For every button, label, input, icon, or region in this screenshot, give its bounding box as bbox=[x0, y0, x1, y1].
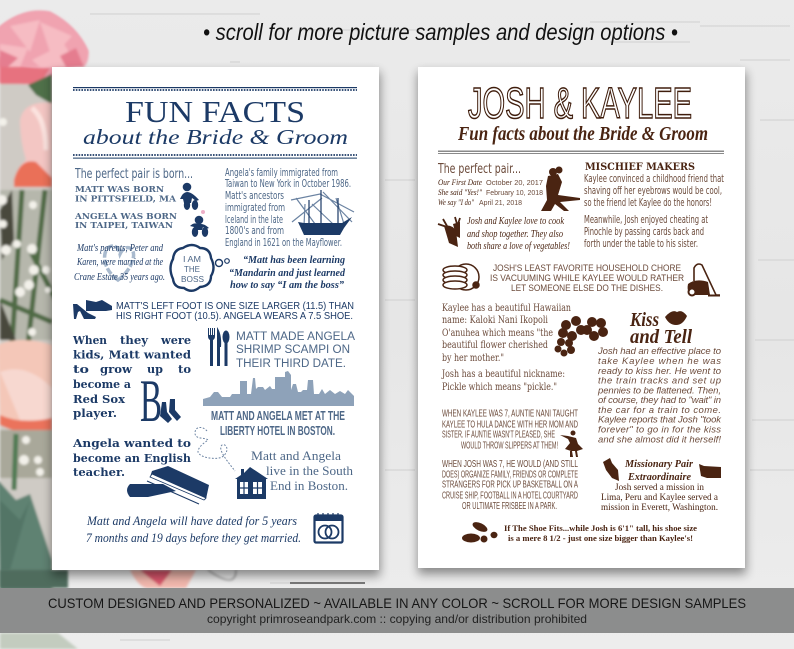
bottom rose and leaf under cards bbox=[0, 570, 236, 649]
text block: shrimp scampi: SHRIMP SCAMPI ON bbox=[236, 344, 350, 356]
text block: the perfect pair dates: We say "I do" bbox=[438, 197, 474, 207]
icon: Boston skyline bbox=[203, 371, 354, 406]
text block: Kiss and Tell: and she almost did it herself! bbox=[598, 434, 721, 445]
text block: the perfect pair is born: ANGELA WAS BORN bbox=[74, 212, 177, 222]
icon: Red Sox B and socks: B bbox=[140, 368, 162, 434]
text block: English teacher: become an English bbox=[73, 452, 191, 465]
text block: mischief makers: Meanwhile, Josh enjoyed cheating at bbox=[584, 214, 708, 226]
text block: family immigration: England in 1621 on the Mayflower. bbox=[225, 237, 342, 249]
text block: Red Sox player: grow bbox=[100, 363, 133, 376]
text block: if the shoe fits: If The Shoe Fits...while Josh is 6'1" tall, his shoe size bbox=[504, 523, 697, 533]
icon: vacuum cleaner bbox=[688, 264, 720, 296]
text block: the perfect pair is born: IN TAIPEI, TAIWAN bbox=[75, 221, 173, 231]
text block: family immigration: 1800's and from bbox=[225, 225, 284, 237]
text block: parents married with heart bbox=[74, 242, 165, 283]
text block: cook and shop together bbox=[467, 216, 570, 252]
icon: calendar with rings bbox=[314, 513, 343, 542]
card shadows bbox=[52, 72, 746, 576]
divider rule bbox=[438, 150, 724, 154]
text block: Liberty Hotel bbox=[211, 408, 345, 438]
text block: Red Sox player: When bbox=[72, 334, 107, 347]
text block: Red Sox player: were bbox=[160, 334, 191, 347]
text block: Red Sox player: to bbox=[178, 363, 191, 376]
text block: household chore: IS VACUUMING WHILE KAYLEE WOULD RATHER bbox=[490, 273, 684, 283]
icon: stack of books bbox=[127, 466, 209, 504]
text block: English teacher: teacher. bbox=[73, 466, 125, 479]
text block: English teacher bbox=[72, 437, 191, 479]
text block: missionary pair: Missionary Pair bbox=[624, 458, 694, 470]
text block: missionary pair: mission in Everett, Washington. bbox=[601, 503, 718, 513]
icon: Washington state map bbox=[699, 464, 721, 478]
text block: hula dance story bbox=[442, 409, 578, 451]
text block: Liberty Hotel: LIBERTY HOTEL IN BOSTON. bbox=[220, 423, 335, 438]
text block: if the shoe fits: is a mere 8 1/2 - just one size bigger than Kaylee's! bbox=[508, 533, 693, 543]
text block: foot size: HIS RIGHT FOOT (10.5). ANGELA WEARS A 7.5 SHOE. bbox=[116, 311, 353, 322]
text block: the perfect pair dates: February 10, 2018 bbox=[486, 188, 543, 197]
text block: South End home: End in Boston. bbox=[270, 478, 348, 493]
text block: cook and shop together: Josh and Kaylee love to cook bbox=[467, 216, 564, 227]
text block: the perfect pair dates bbox=[437, 162, 543, 207]
text block: family immigration: Iceland in the late bbox=[225, 214, 283, 226]
text block: parents married with heart: Crane Estate 35 years ago. bbox=[74, 271, 165, 283]
subtitle: about the Bride and Groom: about the Bride & Groom bbox=[83, 125, 348, 149]
text block: mischief makers: forth under the table to his sister. bbox=[584, 238, 698, 250]
callout: I am the boss thought bubble: I AM bbox=[183, 255, 201, 264]
text block: Liberty Hotel: MATT AND ANGELA MET AT THE bbox=[211, 408, 345, 423]
text block: the perfect pair is born: The perfect pair is born... bbox=[74, 167, 193, 182]
text block: shrimp scampi: THEIR THIRD DATE. bbox=[236, 358, 346, 370]
text block: family immigration: immigrated from bbox=[225, 202, 285, 214]
text block: Kiss and Tell: Kiss bbox=[629, 309, 659, 331]
title: Fun Facts: FUN FACTS bbox=[125, 94, 305, 129]
text block: mischief makers: Pinochle by passing cards back and bbox=[584, 226, 704, 238]
text block: Mandarin quote: “Mandarin and just learned bbox=[229, 267, 345, 279]
text block: the perfect pair is born: MATT WAS BORN bbox=[75, 185, 164, 195]
text block: cook and shop together: both share a love of vegetables! bbox=[467, 241, 570, 252]
text block: the perfect pair is born: IN PITTSFIELD, MA bbox=[75, 194, 176, 204]
text block: mischief makers: shaving off her eyebrows would be cool, bbox=[584, 185, 722, 197]
text block: foot size bbox=[116, 301, 354, 322]
text block: the perfect pair dates: April 21, 2018 bbox=[479, 198, 522, 207]
text block: Red Sox player: up bbox=[147, 363, 163, 376]
text block: Kiss and Tell: take Kaylee when he was bbox=[598, 356, 721, 367]
panel: brown Josh and Kaylee card bbox=[418, 67, 745, 568]
text block: missionary pair bbox=[601, 458, 719, 513]
text block: Mandarin quote: how to say “I am the boss” bbox=[230, 279, 344, 291]
header: scroll note: • scroll for more picture samples and design options • bbox=[203, 19, 678, 45]
text block: Hawaiian name and nickname: O'anuhea which means "the bbox=[442, 327, 553, 339]
text block: Kiss and Tell bbox=[597, 309, 722, 445]
footer headline: CUSTOM DESIGNED AND PERSONALIZED ~ AVAILABLE IN ANY COLOR ~ SCROLL FOR MORE DESIGN SAMPLES bbox=[48, 595, 746, 611]
text block: pick up basketball story: CRUISE SHIP, FOOTBALL IN A HOTEL COURTYARD bbox=[442, 490, 578, 501]
text block: family immigration: Angela's family immigrated from bbox=[225, 167, 338, 179]
text block: Kiss and Tell: ready to kiss her. He went to bbox=[598, 366, 721, 377]
text block: Kiss and Tell: and Tell bbox=[630, 326, 692, 348]
text block: South End home: Matt and Angela bbox=[251, 448, 341, 463]
text block: parents married with heart: Matt's parents, Peter and bbox=[76, 242, 163, 254]
text block: cook and shop together: and shop together. They also bbox=[467, 229, 563, 240]
text block: hula dance story: SISTER. IF AUNTIE WASN'T PLEASED, SHE bbox=[442, 430, 555, 441]
icon: hibiscus flowers bbox=[554, 316, 608, 356]
text block: missionary pair: Extraordinaire bbox=[627, 471, 691, 483]
footer copyright: copyright primroseandpark.com :: copying and/or distribution prohibited bbox=[207, 612, 587, 626]
icon: pale heart bbox=[105, 246, 134, 280]
subtitle: fun facts about the bride and groom: Fun facts about the Bride & Groom bbox=[457, 123, 708, 145]
text block: Mandarin quote bbox=[229, 254, 345, 291]
text block: Hawaiian name and nickname: Kaylee has a beautiful Hawaiian bbox=[442, 302, 571, 314]
text block: Hawaiian name and nickname: by her mother." bbox=[442, 352, 504, 364]
icon: hula dancer bbox=[560, 430, 583, 457]
text block: Hawaiian name and nickname: Josh has a beautiful nickname: bbox=[441, 368, 565, 380]
text block: mischief makers: so the friend let Kaylee do the honors! bbox=[584, 197, 712, 209]
text block: South End home bbox=[251, 448, 353, 493]
text block: Kiss and Tell: the car for a train to come. bbox=[598, 405, 721, 416]
text block: family immigration bbox=[224, 167, 351, 249]
text block: Hawaiian name and nickname: Pickle which means "pickle." bbox=[442, 381, 557, 393]
icon: lips bbox=[665, 311, 687, 325]
text block: Kiss and Tell: Kaylee reports that Josh "took bbox=[598, 415, 722, 426]
callout: I am the boss thought bubble: BOSS bbox=[181, 275, 204, 284]
text block: pick up basketball story: WHEN JOSH WAS 7, HE WOULD (AND STILL bbox=[442, 459, 578, 470]
icon: Peru map bbox=[603, 458, 619, 481]
text block: pick up basketball story bbox=[442, 459, 578, 512]
icon: carrots bbox=[438, 217, 460, 247]
text block: Kiss and Tell: of course, they had to "wait" in bbox=[598, 395, 721, 406]
text block: dating length bbox=[86, 513, 301, 545]
text block: shrimp scampi: MATT MADE ANGELA bbox=[236, 331, 355, 343]
text block: the perfect pair dates: Our First Date bbox=[438, 177, 482, 187]
text block: Hawaiian name and nickname: beautiful flower cherished bbox=[442, 339, 548, 351]
text block: if the shoe fits bbox=[504, 523, 697, 543]
text block: Red Sox player: Red Sox bbox=[73, 393, 125, 406]
text block: family immigration: Matt's ancestors bbox=[225, 190, 284, 202]
text block: the perfect pair dates: October 20, 2017 bbox=[486, 178, 543, 187]
text block: household chore: JOSH'S LEAST FAVORITE HOUSEHOLD CHORE bbox=[493, 263, 681, 273]
icon: baby girl bbox=[190, 210, 209, 237]
top rose bbox=[0, 11, 88, 67]
icon: house bbox=[235, 467, 268, 499]
text block: Kiss and Tell: forever" to go in for the kiss bbox=[598, 424, 721, 435]
icon: stack of dishes bbox=[443, 264, 479, 290]
footer band bbox=[0, 588, 794, 633]
text block: Hawaiian name and nickname: name: Kaloki Nani Ikopoli bbox=[442, 314, 548, 326]
text block: mischief makers bbox=[584, 162, 724, 250]
callout: I am the boss thought bubble bbox=[170, 245, 229, 291]
text block: parents married with heart: Karen, were married at the bbox=[76, 256, 163, 268]
text block: English teacher: Angela wanted to bbox=[72, 437, 191, 450]
text block: household chore: LET SOMEONE ELSE DO THE DISHES. bbox=[511, 283, 663, 293]
text block: Red Sox player bbox=[72, 334, 191, 420]
text block: Red Sox player: they bbox=[120, 334, 149, 347]
top double rule bbox=[73, 87, 357, 90]
text block: pick up basketball story: OR ULTIMATE FRISBEE IN A PARK. bbox=[462, 501, 557, 512]
icon: footprints bbox=[462, 520, 498, 542]
text block: Hawaiian name and nickname bbox=[441, 302, 571, 393]
text block: pick up basketball story: STRANGERS FOR PICK UP BASKETBALL ON A bbox=[442, 480, 578, 491]
text block: the perfect pair is born bbox=[74, 167, 193, 231]
text block: missionary pair: Josh served a mission in bbox=[615, 483, 704, 493]
icon: Mayflower ship bbox=[291, 190, 354, 235]
text block: Mandarin quote: “Matt has been learning bbox=[243, 254, 345, 266]
text block: Kiss and Tell: pennies to be flattened. Then, bbox=[597, 385, 721, 396]
text block: hula dance story: WHEN KAYLEE WAS 7, AUNTIE NANI TAUGHT bbox=[442, 409, 578, 420]
text block: foot size: MATT'S LEFT FOOT IS ONE SIZE LARGER (11.5) THAN bbox=[116, 301, 354, 312]
text block: mischief makers: Kaylee convinced a childhood friend that bbox=[584, 173, 724, 185]
icon: high heel and dress shoe bbox=[73, 300, 112, 319]
text block: Red Sox player: to bbox=[73, 363, 89, 376]
text block: Kiss and Tell: the train tracks and set up bbox=[598, 376, 721, 387]
text block: shrimp scampi bbox=[236, 331, 355, 370]
text block: Red Sox player: become a bbox=[73, 378, 131, 391]
icon: fork, knife and spoon bbox=[208, 327, 230, 366]
text block: dating length: 7 months and 19 days before they get married. bbox=[86, 530, 301, 545]
panel: navy Fun Facts card bbox=[52, 67, 379, 570]
text block: South End home: live in the South bbox=[266, 463, 353, 478]
text block: pick up basketball story: DOES) ORGANIZE FAMILY, FRIENDS OR COMPLETE bbox=[442, 469, 578, 480]
text block: hula dance story: KAYLEE TO HULA DANCE WITH HER MOM AND bbox=[442, 419, 578, 430]
icon: dancing couple silhouette bbox=[541, 166, 580, 211]
text block: family immigration: Taiwan to New York in October 1986. bbox=[224, 178, 351, 190]
text block: the perfect pair dates: She said "Yes!" bbox=[438, 187, 482, 197]
text block: Kiss and Tell: Josh had an effective place to bbox=[597, 346, 721, 357]
text block: mischief makers: MISCHIEF MAKERS bbox=[585, 162, 695, 173]
text block: dating length: Matt and Angela will have dated for 5 years bbox=[86, 513, 297, 528]
text block: Red Sox player: kids, Matt wanted bbox=[73, 348, 191, 362]
text block: the perfect pair dates: The perfect pair... bbox=[437, 162, 521, 177]
callout: I am the boss thought bubble: THE bbox=[184, 265, 200, 274]
icon: baby boy bbox=[180, 183, 199, 210]
text block: missionary pair: Lima, Peru and Kaylee served a bbox=[601, 493, 719, 503]
text block: hula dance story: WOULD THROW SLIPPERS AT THEM! bbox=[461, 440, 558, 451]
arrow: dotted route to house bbox=[195, 427, 235, 471]
lower double rule bbox=[73, 155, 357, 159]
floral decoration on left edge bbox=[0, 11, 88, 592]
text block: Red Sox player: player. bbox=[73, 407, 117, 420]
text block: household chore bbox=[490, 263, 684, 293]
